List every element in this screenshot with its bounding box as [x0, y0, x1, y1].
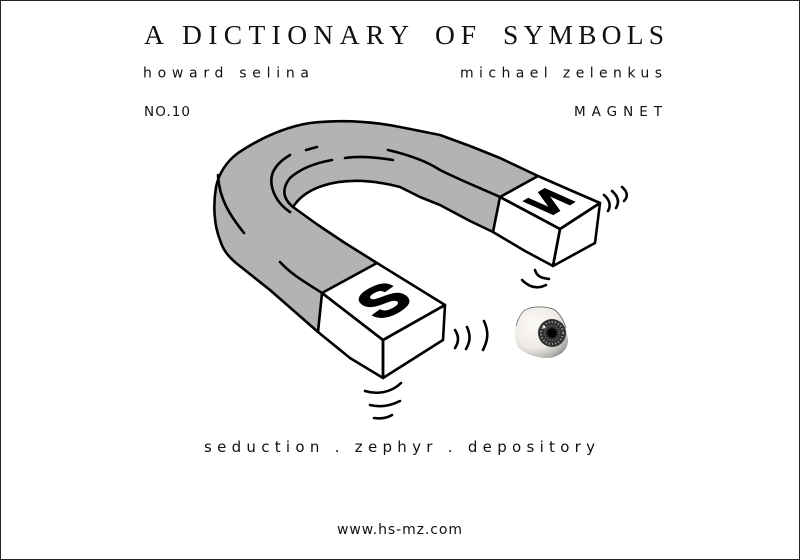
issue number: NO.10 — [144, 104, 190, 120]
inner contour lines — [284, 160, 332, 207]
iris — [538, 319, 566, 347]
title: SYMBOLS — [503, 19, 664, 50]
title: OF — [435, 19, 476, 50]
magnetic waves: south right — [455, 321, 487, 350]
magnetic waves: north below — [522, 270, 549, 287]
keywords caption: seduction . zephyr . depository — [204, 438, 595, 456]
author: howard selina: howard selina — [143, 66, 309, 82]
eyeball — [515, 307, 568, 358]
title — [144, 19, 664, 50]
title: A DICTIONARY — [144, 19, 409, 50]
magnetic waves: south below — [365, 383, 401, 418]
magnetic waves: north right — [604, 187, 627, 211]
letter S: S — [344, 273, 424, 329]
website: www.hs-mz.com — [337, 522, 462, 538]
symbol name: MAGNET — [574, 104, 663, 120]
letter N: N — [513, 184, 586, 220]
horseshoe magnet illustration — [214, 121, 627, 418]
north pole block — [493, 176, 600, 266]
magnet body — [214, 121, 538, 332]
author: michael zelenkus: michael zelenkus — [460, 66, 662, 82]
south pole block — [318, 263, 445, 378]
